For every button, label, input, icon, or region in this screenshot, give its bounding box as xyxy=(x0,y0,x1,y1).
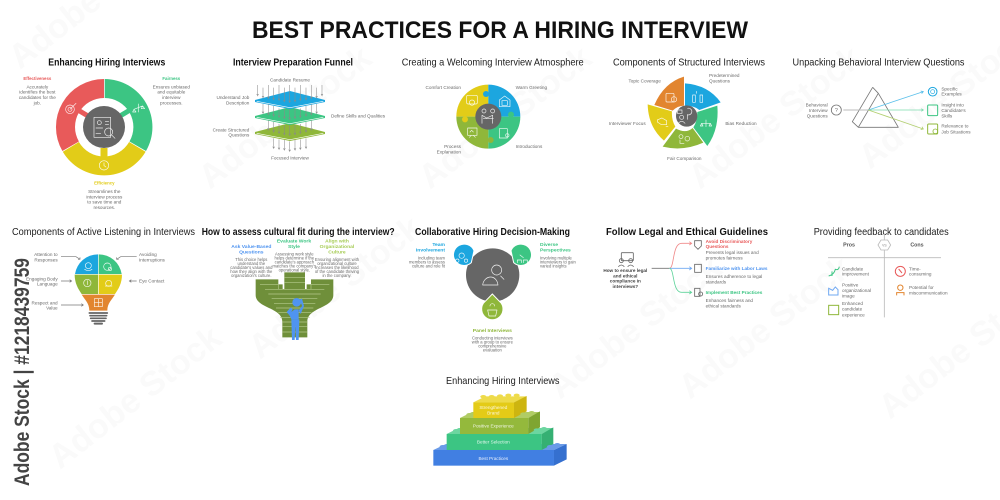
cultural fit texts: candidate's values and xyxy=(230,265,273,270)
text: Adobe Stock xyxy=(682,38,869,196)
text: Adobe Stock xyxy=(242,208,429,366)
pros and cons labels: Enhanced xyxy=(842,301,863,306)
cultural fit texts: Organizational xyxy=(320,244,355,250)
text: Adobe Stock xyxy=(192,38,379,196)
ring labels: processes. xyxy=(160,100,183,105)
ring diagram xyxy=(56,79,152,175)
text: Adobe Stock xyxy=(42,318,229,476)
prism diagram xyxy=(831,87,938,134)
cultural fit texts: Style xyxy=(288,244,300,250)
puzzle labels: Warm Greeting xyxy=(516,85,547,90)
ring labels: resources. xyxy=(93,205,115,210)
collaborative labels xyxy=(409,242,576,352)
ring labels: Efficiency xyxy=(94,181,115,186)
ring labels: interview xyxy=(162,95,181,100)
pros and cons labels: Cons xyxy=(910,243,924,249)
cultural fit texts: matches the company's xyxy=(273,264,316,269)
cultural fit texts: Align with xyxy=(325,239,349,245)
branch labels: Familiarize with Labor Laws xyxy=(706,266,768,271)
branch labels: promotes fairness xyxy=(706,255,743,260)
cultural fit texts: Questions xyxy=(239,249,264,255)
branch labels: Prevents legal issues and xyxy=(706,250,759,255)
branch labels: Avoid Discriminatory xyxy=(706,239,753,244)
cultural fit texts: helps determine if the xyxy=(274,256,315,261)
heading: unpacking behavioral interview questions: Unpacking Behavioral Interview Questions xyxy=(792,56,964,68)
collaborative labels: Involving multiple xyxy=(540,256,573,261)
collaborative labels: interviewers to gain xyxy=(540,260,576,265)
petal labels: Fair Comparison xyxy=(667,156,702,161)
brick pyramid: Positive Experience xyxy=(473,424,514,429)
pros and cons labels: Candidate xyxy=(842,266,864,271)
funnel labels: Candidate Resume xyxy=(270,78,310,83)
pros and cons labels: Pros xyxy=(843,243,855,249)
side stock label: Adobe Stock | #1218439759 xyxy=(11,258,34,486)
prism labels: Candidate's xyxy=(941,108,966,113)
bulb labels xyxy=(26,252,166,311)
text: Adobe Stock xyxy=(542,248,729,406)
bulb labels: Eye Contact xyxy=(139,279,165,284)
heading: creating a welcoming interview atmosphere: Creating a Welcoming Interview Atmosphere xyxy=(402,56,584,68)
heading: enhancing hiring interviews: Enhancing Hiring Interviews xyxy=(48,56,165,68)
heading: providing feedback: Providing feedback to candidates xyxy=(814,226,949,238)
cultural fit texts: understand the xyxy=(237,261,266,266)
ring labels: Fairness xyxy=(162,76,181,81)
pros and cons labels: improvement xyxy=(842,272,870,277)
brick pyramid: Best Practices xyxy=(478,456,509,461)
light bulb xyxy=(61,254,137,324)
brick pyramid: Better Selection xyxy=(477,440,510,445)
petal labels: Topic Coverage xyxy=(628,78,661,83)
cultural fit texts: how they align with the xyxy=(230,269,273,274)
collaborative diagram xyxy=(453,244,531,320)
pros and cons labels: miscommunication xyxy=(909,290,948,295)
funnel diagram xyxy=(255,85,325,151)
text: Adobe Stock xyxy=(672,248,859,406)
collaborative labels: Diverse xyxy=(540,242,558,248)
branch labels: Ensures adherence to legal xyxy=(706,274,762,279)
petal labels: Interviewer Focus xyxy=(609,121,646,126)
bulb labels: Avoiding xyxy=(139,252,157,257)
collaborative labels: Including team xyxy=(418,256,446,261)
heading: components of structured interviews: Components of Structured Interviews xyxy=(613,56,765,68)
bulb labels: Attention to xyxy=(34,252,58,257)
cultural fit texts: operational style. xyxy=(279,268,310,273)
main title: BEST PRACTICES FOR A HIRING INTERVIEW xyxy=(252,17,748,44)
puzzle labels: Explanation xyxy=(437,149,461,154)
panel: components of structured interviews xyxy=(609,56,765,161)
ring labels xyxy=(19,76,190,210)
bulb labels: Engaging Body xyxy=(26,276,58,281)
ring labels: Ensures unbiased xyxy=(153,84,190,89)
ring labels: identifies the best xyxy=(19,90,56,95)
prism labels: Skills xyxy=(941,113,953,118)
prism labels: Questions xyxy=(807,113,828,118)
collaborative labels: with a group to ensure xyxy=(472,339,514,344)
panel: enhancing hiring interviews pyramid xyxy=(433,375,567,466)
cultural fit texts: Culture xyxy=(328,249,346,255)
brick pyramid xyxy=(433,394,567,466)
cultural fit texts: candidate's approach xyxy=(275,260,315,265)
pros and cons labels: Potential for xyxy=(909,285,934,290)
puzzle circle xyxy=(456,85,520,149)
cultural fit texts: in the company. xyxy=(322,273,352,278)
pros and cons labels: VS xyxy=(882,243,887,247)
panel: feedback pros and cons xyxy=(814,226,949,317)
prism labels xyxy=(806,86,971,134)
cultural fit texts: Ask Value-Based xyxy=(231,244,271,250)
branch labels: How to ensure legal xyxy=(603,268,647,273)
cultural fit texts: Assessing work style xyxy=(275,252,314,257)
ring labels: Streamlines the xyxy=(88,189,121,194)
panel: welcoming atmosphere puzzle xyxy=(402,56,584,154)
panel: cultural fit xyxy=(202,226,395,340)
bulb labels: Respect and xyxy=(32,300,58,305)
text: Adobe Stock xyxy=(412,38,599,196)
heading: legal and ethical guidelines: Follow Legal and Ethical Guidelines xyxy=(606,226,768,238)
collaborative labels: comprehensive xyxy=(478,343,507,348)
funnel labels: Understand Job xyxy=(216,95,250,100)
cultural fit texts xyxy=(230,239,360,278)
heading: interview preparation funnel: Interview Preparation Funnel xyxy=(233,56,353,68)
panel: interview preparation funnel xyxy=(213,56,386,160)
bulb labels: Interruptions xyxy=(139,257,166,262)
branch labels: Enhances fairness and xyxy=(706,298,753,303)
prism labels: Relevance to xyxy=(941,124,969,129)
ring labels: to save time and xyxy=(87,200,122,205)
branch labels: Implement Best Practices xyxy=(706,290,763,295)
funnel labels: Questions xyxy=(228,133,250,138)
ring labels: Effectiveness xyxy=(23,76,52,81)
ring labels: Accurately xyxy=(26,84,49,89)
cultural fit texts: of the candidate thriving xyxy=(315,269,360,274)
cultural fit texts: organizational culture xyxy=(317,261,357,266)
petal labels: Questions xyxy=(709,78,731,83)
collaborative labels: Panel Interviews xyxy=(473,328,512,334)
branch labels: compliance in xyxy=(610,279,641,284)
petal labels: Predetermined xyxy=(709,73,740,78)
pros and cons labels: candidate xyxy=(842,307,863,312)
ring labels: job. xyxy=(33,100,41,105)
heading: components of active listening: Components of Active Listening in Interviews xyxy=(12,226,195,238)
staircase and person xyxy=(256,272,333,340)
panel: legal and ethical guidelines xyxy=(603,226,768,308)
brick pyramid: Strengthened xyxy=(479,405,508,410)
pros and cons labels: image xyxy=(842,293,855,298)
panel: active listening bulb xyxy=(12,226,195,324)
collaborative labels: Involvement xyxy=(416,247,445,253)
funnel labels: Focused Interview xyxy=(271,155,310,160)
bulb labels: Responses xyxy=(34,257,58,262)
cultural fit texts: increases the likelihood xyxy=(315,265,359,270)
branch labels: and ethical xyxy=(613,273,637,278)
collaborative labels: Conducting interviews xyxy=(472,335,513,340)
prism labels: Examples xyxy=(941,92,962,97)
pros and cons chart xyxy=(828,233,941,317)
ring labels: interview process xyxy=(86,194,123,199)
petal labels: Bias Reduction xyxy=(725,121,757,126)
panel: enhancing hiring interviews ring xyxy=(19,56,190,210)
funnel labels: Description xyxy=(226,100,250,105)
prism labels: ? xyxy=(835,108,838,114)
bulb labels: Value xyxy=(46,306,58,311)
puzzle labels: Process xyxy=(444,144,462,149)
pros and cons labels: consuming xyxy=(909,272,932,277)
petal labels xyxy=(609,73,757,161)
brick pyramid: Brand xyxy=(487,410,500,415)
pros and cons labels xyxy=(842,243,948,317)
pros and cons labels: Positive xyxy=(842,282,859,287)
prism labels: Job Situations xyxy=(941,129,971,134)
branch labels: interviews? xyxy=(613,284,638,289)
prism labels: Interview xyxy=(809,108,828,113)
cultural fit texts: Ensuring alignment with xyxy=(315,257,360,262)
cultural fit texts: organization's culture. xyxy=(231,273,271,278)
puzzle labels: Introductions xyxy=(516,144,543,149)
prism labels: Behavioral xyxy=(806,103,828,108)
collaborative labels: varied insights xyxy=(540,264,567,269)
pros and cons labels: Time- xyxy=(909,266,921,271)
panel: collaborative hiring xyxy=(409,226,576,352)
prism labels: Insight into xyxy=(941,103,964,108)
puzzle labels: Comfort Creation xyxy=(426,85,461,90)
panel: unpacking behavioral interview questions xyxy=(792,56,971,134)
branch labels: ethical standards xyxy=(706,303,742,308)
heading: collaborative hiring: Collaborative Hiring Decision-Making xyxy=(415,226,570,238)
heading: cultural fit: How to assess cultural fit during the interview? xyxy=(202,226,395,238)
funnel labels: Create Structured xyxy=(213,127,250,132)
branch labels xyxy=(603,239,768,308)
branch labels: standards xyxy=(706,279,727,284)
funnel labels xyxy=(213,78,386,160)
ring labels: candidates for the xyxy=(19,95,56,100)
pros and cons labels: experience xyxy=(842,312,865,317)
branch labels: Questions xyxy=(706,244,729,249)
prism labels: Specific xyxy=(941,86,958,91)
heading: pyramid: Enhancing Hiring Interviews xyxy=(446,375,560,387)
collaborative labels: members to assess xyxy=(409,260,445,265)
funnel labels: Define Skills and Qualities xyxy=(331,114,386,119)
collaborative labels: Perspectives xyxy=(540,247,571,253)
collaborative labels: evaluation xyxy=(483,347,502,352)
collaborative labels: culture and role fit xyxy=(412,264,446,269)
puzzle labels xyxy=(426,85,547,154)
bulb labels: Language xyxy=(37,282,58,287)
cultural fit texts: Evaluate Work xyxy=(277,239,311,245)
ring labels: and equitable xyxy=(157,90,186,95)
branch diagram xyxy=(618,241,703,296)
petal diagram xyxy=(648,77,721,148)
pros and cons labels: organizational xyxy=(842,288,871,293)
collaborative labels: Team xyxy=(432,242,446,248)
cultural fit texts: This choice helps xyxy=(235,257,267,262)
